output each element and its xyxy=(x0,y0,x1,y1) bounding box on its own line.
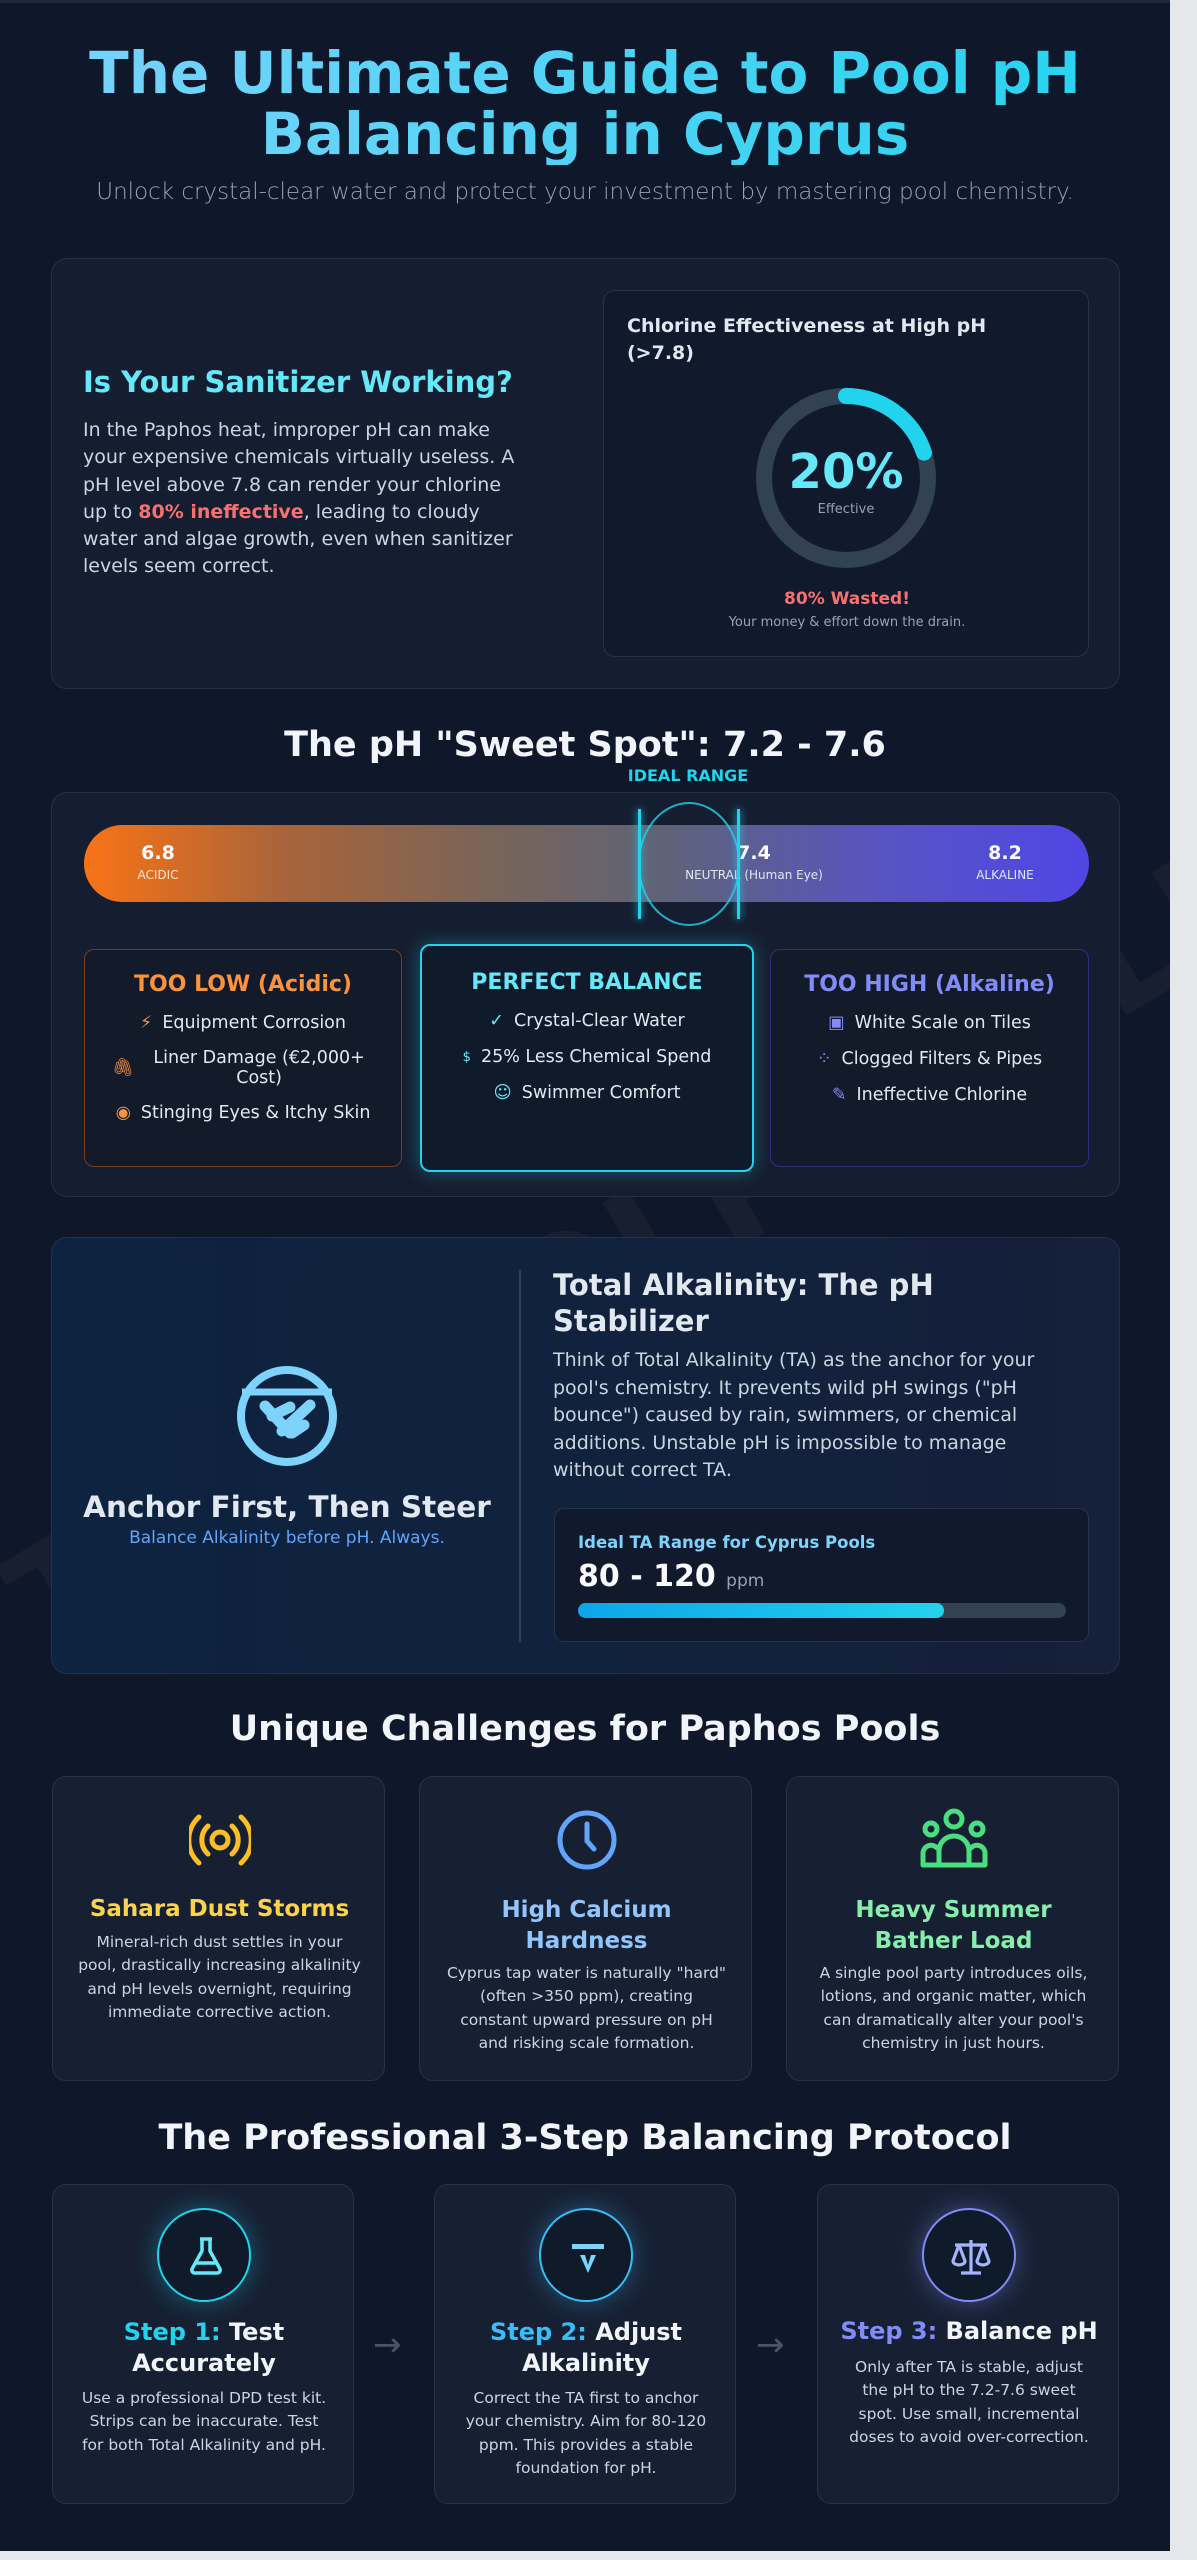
card: calcium hardness: High Calcium xyxy=(501,1897,672,1923)
card: too low: ⚡ xyxy=(140,1013,152,1033)
card: perfect balance: ☺ xyxy=(493,1083,512,1103)
card: bather load xyxy=(786,1776,1119,2081)
wasted label: 80% Wasted! xyxy=(784,589,910,609)
card: too high: White Scale on Tiles xyxy=(855,1013,1031,1033)
icon: scale xyxy=(922,2208,1016,2302)
card: perfect balance: Crystal-Clear Water xyxy=(514,1011,685,1031)
title: Balancing in Cyprus xyxy=(261,100,909,168)
card: sahara dust xyxy=(52,1776,385,2081)
icon: broadcast xyxy=(189,1814,251,1866)
card: bather load: Bather Load xyxy=(875,1928,1032,1954)
divider xyxy=(519,1270,521,1642)
icon: flask xyxy=(157,2208,251,2302)
text: sanitizer explanation: In the Paphos heat, improper pH can make your expensive chemicals virtually useless. A pH level above 7.8 can render your chlorine up to 80% ineffective, leading to cloudy water and algae growth, even when sanitizer levels seem correct. xyxy=(83,419,514,577)
subtitle: Unlock crystal-clear water and protect your investment by mastering pool chemistry. xyxy=(96,179,1074,205)
panel: total alkalinity xyxy=(51,1237,1120,1674)
card: too low: Liner Damage (€2,000+ Cost) xyxy=(153,1048,365,1088)
heading: total alkalinity: Total Alkalinity: The pH Stabilizer xyxy=(553,1268,934,1338)
step 1 card: Step 1: Test xyxy=(124,2318,284,2346)
TA range box: 80 - 120 ppm xyxy=(578,1559,764,1594)
card: too low: 🖇 xyxy=(112,1058,134,1078)
chart card: chlorine effectiveness xyxy=(603,290,1089,657)
card: too high: Clogged Filters & Pipes xyxy=(841,1049,1042,1069)
card: perfect balance: 25% Less Chemical Spend xyxy=(481,1047,711,1067)
label 6.8 xyxy=(137,842,179,882)
card: too low: TOO LOW (Acidic) xyxy=(134,972,352,997)
step 1 card: Use a professional DPD test kit. Strips can be inaccurate. Test for both Total Alkalinity and pH. xyxy=(82,2389,326,2454)
step 2 card: Alkalinity xyxy=(522,2349,650,2377)
step 1 card: Accurately xyxy=(132,2349,276,2377)
card: too high: Ineffective Chlorine xyxy=(856,1085,1027,1105)
card: bather load: A single pool party introduces oils, lotions, and organic matter, which can dramatically alter your pool's chemistry in just hours. xyxy=(820,1964,1087,2052)
card: perfect balance: ✓ xyxy=(489,1011,504,1031)
card: bather load: Heavy Summer xyxy=(855,1897,1052,1923)
heading: sanitizer: Is Your Sanitizer Working? xyxy=(83,365,513,399)
panel: sanitizer xyxy=(51,258,1120,689)
label 7.4 xyxy=(685,842,823,882)
card: perfect balance: $ xyxy=(463,1050,471,1064)
label 7.4: NEUTRAL (Human Eye) xyxy=(685,868,823,882)
TA bar xyxy=(578,1603,1066,1618)
step 2 card: Correct the TA first to anchor your chemistry. Aim for 80-120 ppm. This provides a stable foundation for pH. xyxy=(466,2389,706,2477)
step 2 card xyxy=(434,2184,736,2504)
arrow 1: → xyxy=(373,2325,402,2365)
icon: anchor xyxy=(237,1366,337,1466)
donut chart xyxy=(756,388,936,568)
heading: anchor first: Anchor First, Then Steer xyxy=(83,1490,491,1524)
card: too high: ⁘ xyxy=(817,1049,831,1069)
card: too high: ▣ xyxy=(828,1013,845,1033)
title: The Ultimate Guide to Pool pH xyxy=(89,39,1081,107)
card: perfect balance: Swimmer Comfort xyxy=(522,1083,681,1103)
heading: sweet spot: The pH "Sweet Spot": 7.2 - 7.6 xyxy=(284,725,886,765)
wasted note: Your money & effort down the drain. xyxy=(729,615,965,630)
card: perfect balance: PERFECT BALANCE xyxy=(471,970,703,995)
icon: filter xyxy=(539,2208,633,2302)
TA range box xyxy=(554,1508,1089,1642)
text: alkalinity explanation: Think of Total Alkalinity (TA) as the anchor for your pool's chemistry. It prevents wild pH swings ("pH bounce") caused by rain, swimmers, or chemical additions. Unstable pH is impossible to manage without correct TA. xyxy=(553,1349,1034,1481)
card: sahara dust: Sahara Dust Storms xyxy=(90,1896,349,1922)
card: too low: Equipment Corrosion xyxy=(162,1013,346,1033)
ideal range label: IDEAL RANGE xyxy=(628,766,748,785)
ideal range marker xyxy=(632,802,746,926)
card: too high: TOO HIGH (Alkaline) xyxy=(804,972,1055,997)
donut chart: 20% xyxy=(789,444,903,500)
subtext: anchor first: Balance Alkalinity before pH. Always. xyxy=(129,1528,445,1548)
label 8.2: 8.2 xyxy=(988,842,1022,864)
heading: protocol: The Professional 3-Step Balancing Protocol xyxy=(158,2118,1012,2158)
icon: clock xyxy=(558,1810,616,1870)
title xyxy=(0,43,1170,165)
card: too low: Stinging Eyes & Itchy Skin xyxy=(141,1103,370,1123)
heading: challenges: Unique Challenges for Paphos Pools xyxy=(230,1709,940,1749)
card: calcium hardness: Cyprus tap water is naturally "hard" (often >350 ppm), creating constant upward pressure on pH and risking scale formation. xyxy=(447,1964,726,2052)
arrow 2: → xyxy=(756,2325,784,2365)
card: perfect balance xyxy=(420,944,754,1172)
card: too high xyxy=(770,949,1089,1167)
TA range box: Ideal TA Range for Cyprus Pools xyxy=(578,1533,875,1552)
donut chart: Effective xyxy=(818,502,874,517)
step 3 card: Only after TA is stable, adjust the pH to the 7.2-7.6 sweet spot. Use small, incremental doses to avoid over-correction. xyxy=(849,2358,1089,2446)
step 3 card xyxy=(817,2184,1119,2504)
panel: pH scale xyxy=(51,792,1120,1197)
icon: people xyxy=(920,1808,988,1868)
step 3 card: Step 3: Balance pH xyxy=(840,2317,1098,2345)
step 2 card: Step 2: Adjust xyxy=(490,2318,682,2346)
label 6.8: 6.8 xyxy=(141,842,175,864)
card: too high: ✎ xyxy=(832,1085,846,1105)
card: sahara dust: Mineral-rich dust settles in your pool, drastically increasing alkalinity and pH levels overnight, requiring immediate corrective action. xyxy=(78,1933,361,2021)
card: calcium hardness: Hardness xyxy=(526,1928,647,1954)
card: too low: ◉ xyxy=(116,1103,131,1123)
chart title: Chlorine Effectiveness at High pH (>7.8) xyxy=(627,315,986,364)
label 7.4: 7.4 xyxy=(737,842,771,864)
card: calcium hardness xyxy=(419,1776,752,2081)
label 6.8: ACIDIC xyxy=(137,868,179,882)
pH gradient bar xyxy=(84,825,1089,902)
step 1 card xyxy=(52,2184,354,2504)
label 8.2: ALKALINE xyxy=(976,868,1034,882)
label 8.2 xyxy=(976,842,1034,882)
card: too low xyxy=(84,949,402,1167)
